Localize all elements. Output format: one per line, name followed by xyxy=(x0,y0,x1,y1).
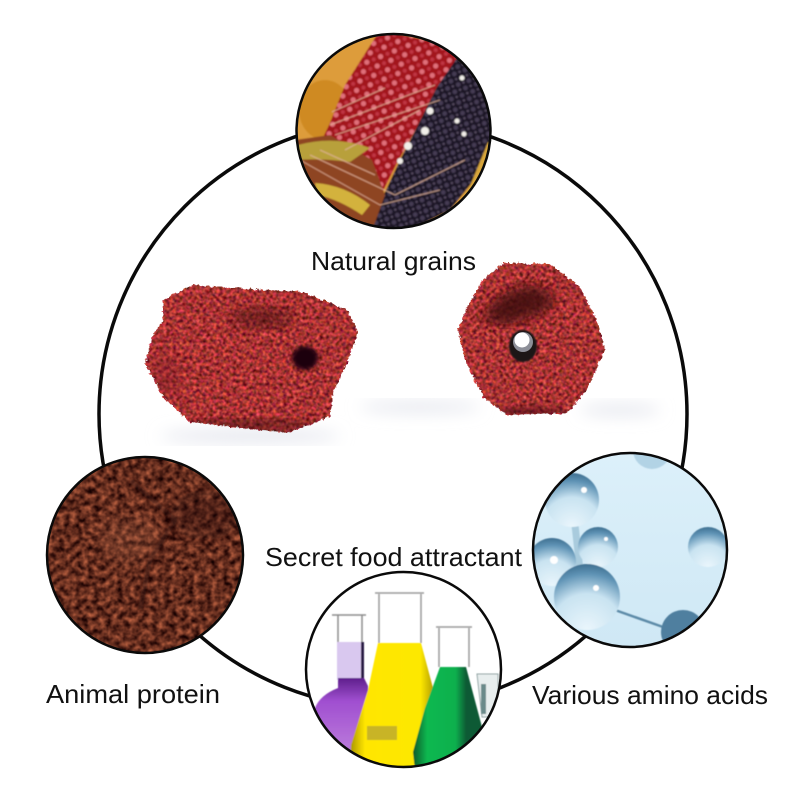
product photo: bait pellets xyxy=(145,263,660,442)
green flask xyxy=(413,627,484,770)
purple flask xyxy=(315,614,370,750)
pellet hole xyxy=(509,330,537,362)
label: natural grains: Natural grains xyxy=(311,246,476,276)
ingredient: amino acids xyxy=(532,452,728,648)
right pellet xyxy=(458,263,605,418)
ingredient: natural grains xyxy=(295,30,495,235)
connecting ring xyxy=(99,120,687,708)
left pellet xyxy=(145,285,358,433)
pellet hole xyxy=(292,346,318,370)
wheat xyxy=(295,135,385,228)
molecule spheres xyxy=(545,473,599,527)
label: animal protein: Animal protein xyxy=(46,679,220,709)
dark grain field xyxy=(373,58,495,235)
ingredient: animal protein xyxy=(45,455,245,655)
small clear flask xyxy=(477,674,498,717)
red grain field xyxy=(324,35,458,190)
ingredient: secret food attractant flasks xyxy=(300,572,501,770)
orange grain field xyxy=(298,36,472,221)
pellet shadows xyxy=(160,402,660,442)
white seeds xyxy=(397,76,466,164)
label: various amino acids: Various amino acids xyxy=(532,680,768,710)
label: secret food attractant: Secret food attractant xyxy=(265,542,523,572)
yellow flask xyxy=(350,593,433,770)
